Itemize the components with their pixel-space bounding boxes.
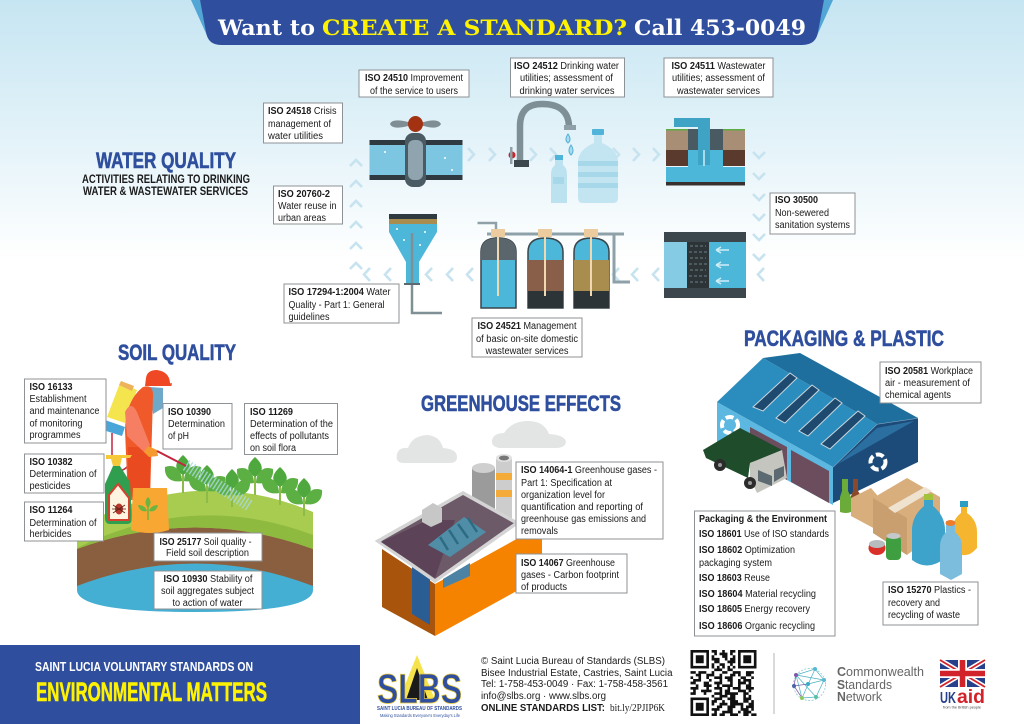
icon: funnel sampling vessel [389, 214, 442, 313]
label: ISO 11264: Determination of [30, 518, 97, 529]
panel: packaging and the environment: Packaging & the Environment [699, 514, 828, 525]
label: ISO 10382: pesticides [30, 481, 70, 492]
fertiliser bag [131, 488, 169, 533]
label: ISO 10930: soil aggregates subject [161, 586, 254, 597]
label: ISO 11264 [24, 502, 104, 541]
label: ISO 24512: utilities; assessment of [520, 73, 613, 84]
roof box [422, 503, 442, 527]
farmer [103, 370, 186, 500]
logo: Commonwealth Standards Network: Network [837, 690, 883, 704]
label: ISO 10390: ISO 10390 [168, 407, 211, 418]
grass shade [77, 515, 313, 549]
label: ISO 14067: of products [521, 582, 567, 593]
label: ISO 24511 [664, 58, 773, 97]
skylight [428, 517, 486, 557]
section heading: greenhouse effects: GREENHOUSE EFFECTS [421, 391, 621, 416]
label: ISO 11264: ISO 11264 [30, 505, 73, 516]
label: ISO 20760-2 [274, 186, 342, 224]
label: ISO 30500 [770, 193, 855, 234]
clouds [397, 421, 566, 463]
logo: UK aid with flag: aid [957, 687, 985, 708]
label: ISO 11269: effects of pollutants [250, 431, 329, 442]
label: ISO 24518 [264, 103, 342, 143]
section heading: soil quality: SOIL QUALITY [118, 340, 236, 365]
label: ISO 10390: of pH [168, 431, 189, 442]
doors [750, 427, 787, 480]
label: ISO 11264: herbicides [30, 529, 72, 540]
footer contact details: Tel: 1-758-453-0049 · Fax: 1-758-458-3561 [481, 679, 668, 690]
cardboard boxes [851, 478, 940, 555]
label: ISO 30500: Non-sewered [775, 208, 829, 219]
label: ISO 11269: on soil flora [250, 443, 296, 454]
label: ISO 16133: and maintenance [30, 406, 100, 417]
label: ISO 20581 [880, 362, 981, 403]
cans [868, 533, 901, 560]
label: ISO 16133: programmes [30, 430, 80, 441]
icon: sanitation filter [664, 232, 746, 298]
logo: Commonwealth Standards Network: Standards [837, 678, 892, 692]
label: ISO 20581: ISO 20581 Workplace [885, 366, 973, 377]
label: ISO 24510 [359, 70, 469, 97]
label: ISO 24521: of basic on-site domestic [476, 334, 578, 345]
label: ISO 24510: of the service to users [370, 86, 458, 97]
label: ISO 10930: ISO 10930 Stability of [164, 574, 253, 585]
footer title panel [0, 645, 360, 724]
label: ISO 10930 [154, 571, 262, 609]
panel: packaging and the environment: ISO 18602 Optimization [699, 545, 795, 556]
label: ISO 24511: ISO 24511 Wastewater [672, 61, 766, 72]
label: ISO 17294-1:2004: Quality - Part 1: General [288, 300, 384, 311]
label: ISO 14067: gases - Carbon footprint [521, 570, 619, 581]
spray mist [186, 465, 250, 506]
footer contact details [481, 656, 673, 714]
panel: packaging and the environment: packaging system [699, 558, 772, 569]
label: ISO 24511: wastewater services [676, 86, 760, 97]
panel: packaging and the environment: ISO 18603 Reuse [699, 573, 770, 584]
label: ISO 24512: drinking water services [520, 86, 614, 97]
header banner: Want to [217, 15, 315, 40]
water layer [77, 563, 313, 612]
label: ISO 14067: ISO 14067 Greenhouse [521, 558, 615, 569]
label: ISO 14064-1: removals [521, 526, 558, 537]
skylights [753, 373, 865, 449]
label: ISO 11269: ISO 11269 [250, 407, 293, 418]
label: ISO 16133: of monitoring [30, 418, 82, 430]
label: ISO 16133: ISO 16133 [30, 382, 73, 393]
logo: Commonwealth Standards Network [792, 665, 924, 704]
label: ISO 25177 [154, 533, 262, 561]
building walls [382, 549, 435, 636]
truck [703, 428, 787, 493]
panel: packaging and the environment: ISO 18606 Organic recycling [699, 621, 815, 632]
label: ISO 20581: air - measurement of [885, 378, 970, 389]
label: ISO 20760-2: urban areas [278, 213, 326, 224]
recycling symbols [722, 417, 738, 433]
header banner: Call 453-0049 [634, 15, 806, 40]
header banner [191, 0, 833, 45]
icon: pipe valve [370, 116, 462, 187]
footer contact details: ONLINE STANDARDS LIST: [481, 703, 605, 714]
label: ISO 24512: ISO 24512 Drinking water [514, 61, 620, 72]
flow arrows: water cycle chevrons [350, 148, 765, 281]
chimneys [472, 454, 512, 523]
label: ISO 14064-1: organization level for [521, 490, 606, 501]
label: ISO 30500: ISO 30500 [775, 195, 818, 206]
panel: packaging and the environment: ISO 18601 Use of ISO standards [699, 529, 829, 540]
section heading: water quality: ACTIVITIES RELATING TO DRINKING [82, 174, 250, 186]
divider [773, 653, 775, 714]
glass bottles [840, 479, 861, 513]
icon: wastewater pit [666, 118, 745, 186]
panel: packaging and the environment [694, 511, 835, 636]
plastic bottles [912, 494, 977, 580]
footer contact details: bit.ly/2PJIP6K [610, 703, 666, 714]
label: ISO 10390: Determination [168, 419, 225, 430]
footer title panel: ENVIRONMENTAL MATTERS [36, 677, 267, 707]
label: ISO 15270 [883, 582, 978, 625]
label: ISO 20760-2: Water reuse in [278, 201, 336, 212]
plants [165, 455, 322, 516]
section heading: packaging & plastic: PACKAGING & PLASTIC [744, 326, 944, 351]
label: ISO 24518: water utilities [267, 131, 323, 142]
icon: tap and water bottles [508, 104, 618, 203]
spray bottle with bug label [105, 455, 132, 524]
grass layers [77, 490, 313, 549]
footer contact details: © Saint Lucia Bureau of Standards (SLBS) [481, 656, 665, 667]
label: ISO 14064-1: ISO 14064-1 Greenhouse gases - [521, 465, 657, 476]
label: ISO 11269 [244, 404, 338, 454]
label: ISO 24521 [472, 318, 582, 357]
logo: SLBS [377, 655, 463, 718]
label: ISO 24521: wastewater services [485, 346, 568, 357]
roof [378, 493, 517, 581]
footer contact details: Bisee Industrial Estate, Castries, Saint Lucia [481, 668, 673, 679]
label: ISO 10930: to action of water [172, 598, 243, 609]
section heading: water quality: WATER & WASTEWATER SERVICES [83, 186, 248, 198]
illustration: factory with clouds [378, 421, 566, 636]
soil layer [77, 526, 313, 586]
illustration: soil layers, farmer and plants [77, 370, 322, 612]
header banner: CREATE A STANDARD? [322, 15, 627, 40]
wall windows [412, 567, 430, 625]
label: ISO 11269: Determination of the [250, 419, 333, 430]
icon: treatment tanks [478, 223, 630, 308]
label: ISO 10390 [163, 404, 232, 449]
footer title panel: SAINT LUCIA VOLUNTARY STANDARDS ON [35, 660, 253, 674]
gable end [833, 418, 918, 503]
label: ISO 14064-1: greenhouse gas emissions and [521, 514, 646, 525]
label: ISO 30500: sanitation systems [775, 220, 850, 231]
section heading: water quality: WATER QUALITY [96, 148, 236, 173]
logo: UK aid with flag: from the British people [943, 704, 982, 710]
panel: packaging and the environment: ISO 18605 Energy recovery [699, 604, 810, 615]
logo: SLBS: SAINT LUCIA BUREAU OF STANDARDS [377, 706, 463, 712]
label: ISO 16133 [24, 379, 106, 443]
logo: SLBS: SLBS [377, 665, 462, 712]
section heading: water quality [82, 148, 250, 198]
logo: SLBS: Making Standards Everyone's Everyday's Life [380, 713, 460, 718]
label: ISO 15270: recovery and [888, 598, 940, 609]
label: ISO 15270: ISO 15270 Plastics - [888, 585, 971, 596]
logo: UK aid with flag [940, 660, 985, 710]
label: ISO 15270: recycling of waste [888, 610, 960, 621]
label: ISO 10382: Determination of [30, 469, 97, 480]
label: ISO 14064-1: Part 1: Specification at [521, 478, 612, 489]
footer contact details: info@slbs.org · www.slbs.org [481, 691, 606, 702]
label: ISO 24510: ISO 24510 Improvement [365, 73, 463, 84]
panel: packaging and the environment: ISO 18604 Material recycling [699, 589, 816, 600]
label: ISO 25177: Field soil description [166, 548, 249, 559]
label: ISO 14064-1 [516, 462, 663, 539]
label: ISO 24518: ISO 24518 Crisis [268, 106, 336, 117]
label: ISO 17294-1:2004 [284, 284, 399, 323]
label: ISO 20760-2: ISO 20760-2 [278, 189, 330, 200]
label: ISO 24518: management of [268, 119, 331, 130]
label: ISO 24521: ISO 24521 Management [478, 321, 577, 332]
label: ISO 14064-1: quantification and reporting of [521, 502, 643, 513]
logo: Commonwealth Standards Network: Commonwealth [837, 665, 924, 679]
roof planes [717, 358, 877, 467]
QR code [690, 651, 756, 715]
side wall [717, 402, 833, 505]
label: ISO 24512 [510, 58, 624, 97]
label: ISO 17294-1:2004: guidelines [288, 312, 330, 323]
label: ISO 17294-1:2004: ISO 17294-1:2004 Water [288, 287, 391, 298]
label: ISO 14067 [516, 554, 627, 593]
label: ISO 20581: chemical agents [885, 390, 951, 401]
label: ISO 25177: ISO 25177 Soil quality - [160, 537, 252, 548]
label: ISO 10382: ISO 10382 [30, 457, 73, 468]
label: ISO 16133: Establishment [30, 394, 87, 405]
illustration: recycling warehouse [703, 353, 977, 580]
label: ISO 10382 [24, 454, 104, 493]
logo: UK aid with flag: UK [940, 690, 956, 707]
label: ISO 24511: utilities; assessment of [672, 73, 765, 84]
